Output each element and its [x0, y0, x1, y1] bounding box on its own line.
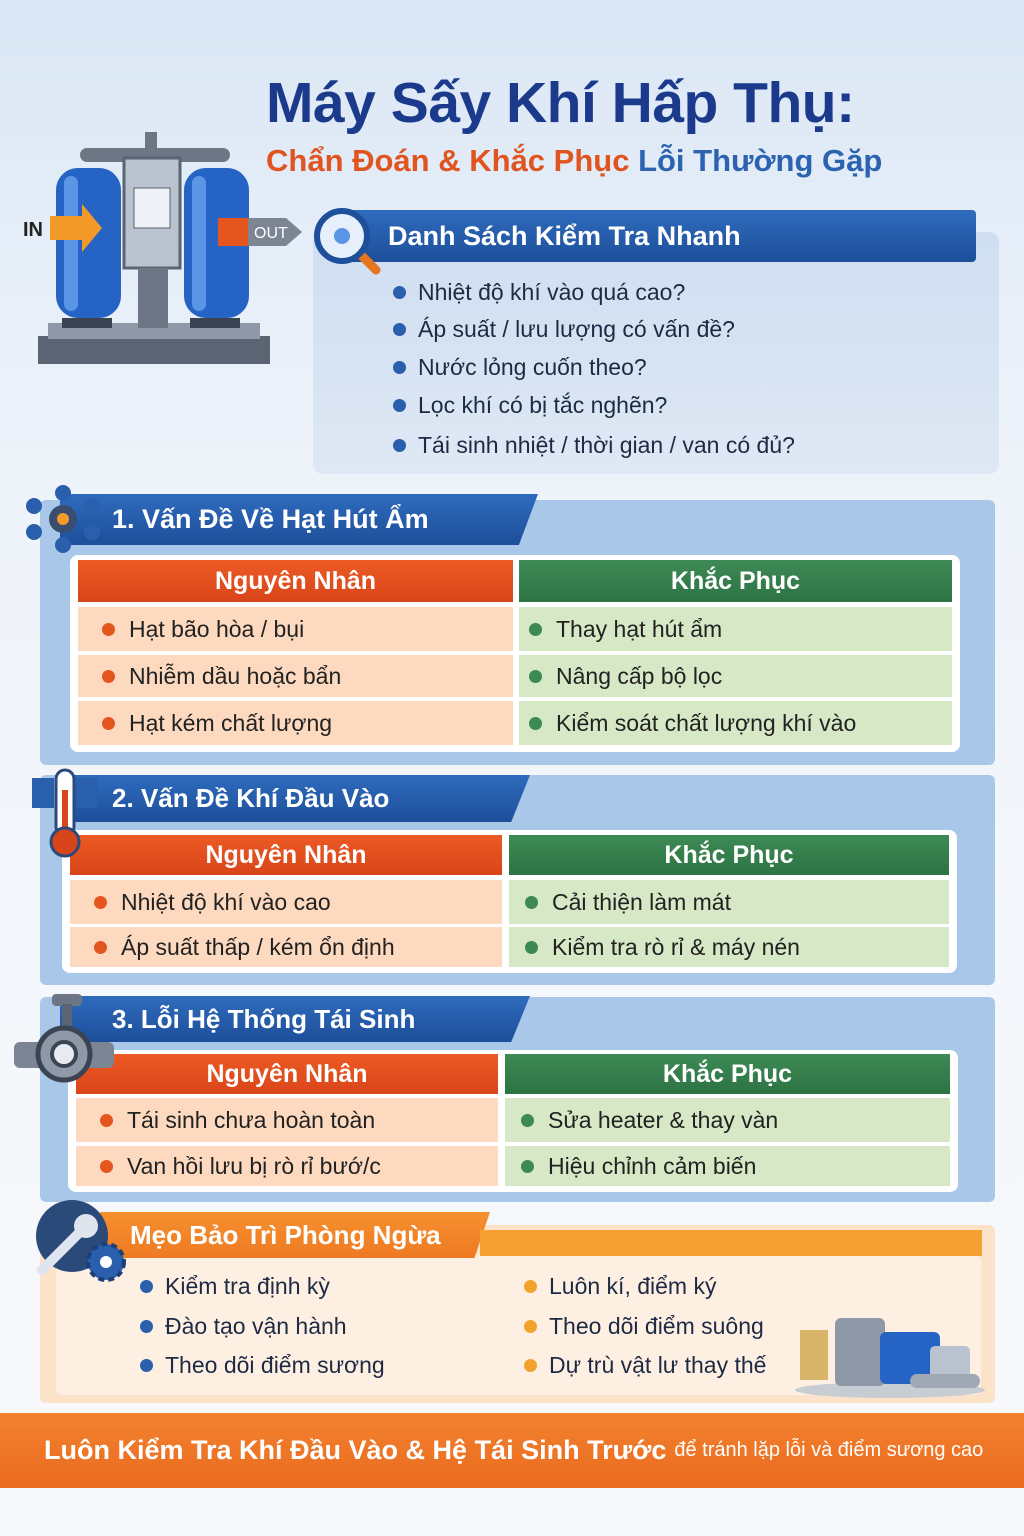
tips right column: Theo dõi điểm suông [549, 1313, 764, 1339]
checklist items: Nước lỏng cuốn theo? [418, 354, 647, 380]
checklist items [393, 279, 795, 458]
table 2: Kiểm tra rò rỉ & máy nén [552, 934, 800, 960]
icon: dryer machine: IN [23, 219, 43, 241]
table 3: Nguyên Nhân [206, 1060, 368, 1088]
icon: wrench and gears [36, 1200, 126, 1282]
panel: checklist [313, 232, 999, 474]
panel: section 3 [40, 997, 995, 1202]
table 3: Van hồi lưu bị rò rỉ bướ/c [127, 1152, 381, 1178]
table 2: Khắc Phục [664, 840, 794, 868]
table 1 [70, 555, 960, 752]
heading: maintenance tips: Mẹo Bảo Trì Phòng Ngừa [130, 1220, 441, 1250]
icon: thermometer [32, 768, 98, 858]
table 3: Khắc Phục [663, 1060, 792, 1088]
tips right column: Dự trù vật lư thay thế [549, 1352, 766, 1378]
table 3: Tái sinh chưa hoàn toàn [127, 1106, 375, 1132]
table 1: Kiểm soát chất lượng khí vào [556, 710, 856, 736]
table 1: Nâng cấp bộ lọc [556, 662, 722, 688]
panel: section 1 [40, 500, 995, 765]
tips left column [140, 1273, 385, 1378]
checklist items: Nhiệt độ khí vào quá cao? [418, 279, 685, 305]
heading: section 1 [60, 494, 538, 545]
table 1: Hạt bão hòa / bụi [129, 616, 304, 642]
table 2: Nhiệt độ khí vào cao [121, 888, 331, 914]
subtitle: Chẩn Đoán & Khắc Phục Lỗi Thường Gặp [266, 143, 882, 178]
footer banner: Luôn Kiểm Tra Khí Đầu Vào & Hệ Tái Sinh Trước [44, 1435, 666, 1465]
panel: section 2 [40, 775, 995, 985]
panel: maintenance tips [40, 1225, 995, 1403]
checklist header [340, 210, 976, 262]
table 1: Khắc Phục [671, 566, 800, 594]
title: Máy Sấy Khí Hấp Thụ: [266, 71, 855, 135]
tips right column: Luôn kí, điểm ký [549, 1273, 716, 1299]
heading: section 1: 1. Vấn Đề Về Hạt Hút Ẩm [112, 504, 429, 534]
table 1: Nhiễm dầu hoặc bẩn [129, 662, 341, 688]
icon: spare parts [795, 1318, 985, 1398]
checklist header: Danh Sách Kiểm Tra Nhanh [388, 220, 741, 250]
checklist items: Lọc khí có bị tắc nghẽn? [418, 392, 667, 418]
heading: section 3: 3. Lỗi Hệ Thống Tái Sinh [112, 1004, 415, 1034]
checklist items: Tái sinh nhiệt / thời gian / van có đủ? [418, 432, 795, 458]
tips right column [524, 1273, 766, 1378]
table 1: Thay hạt hút ẩm [556, 616, 722, 642]
heading: maintenance tips [100, 1212, 490, 1258]
table 2: Áp suất thấp / kém ổn định [121, 934, 395, 960]
footer banner: để tránh lặp lỗi và điểm sương cao [674, 1439, 983, 1461]
table 1: Hạt kém chất lượng [129, 710, 332, 736]
table 2: Cải thiện làm mát [552, 888, 731, 914]
heading: section 2 [60, 775, 530, 822]
heading: section 3 [60, 996, 530, 1042]
table 3: Sửa heater & thay vàn [548, 1106, 778, 1132]
table 2 [62, 830, 957, 973]
tips left column: Theo dõi điểm sương [165, 1352, 385, 1378]
tips left column: Đào tạo vận hành [165, 1313, 347, 1339]
footer banner [0, 1413, 1024, 1488]
icon: valve [14, 994, 114, 1082]
icon: magnifier [314, 208, 380, 274]
table 2: Nguyên Nhân [205, 840, 367, 868]
icon: molecules [26, 485, 100, 553]
table 3: Hiệu chỉnh cảm biến [548, 1152, 756, 1178]
table 3 [68, 1050, 958, 1192]
tips left column: Kiểm tra định kỳ [165, 1273, 330, 1299]
heading: section 2: 2. Vấn Đề Khí Đầu Vào [112, 783, 389, 813]
icon: dryer machine [23, 132, 302, 364]
checklist items: Áp suất / lưu lượng có vấn đề? [418, 316, 735, 342]
table 1: Nguyên Nhân [215, 566, 376, 594]
icon: dryer machine: OUT [254, 225, 288, 242]
